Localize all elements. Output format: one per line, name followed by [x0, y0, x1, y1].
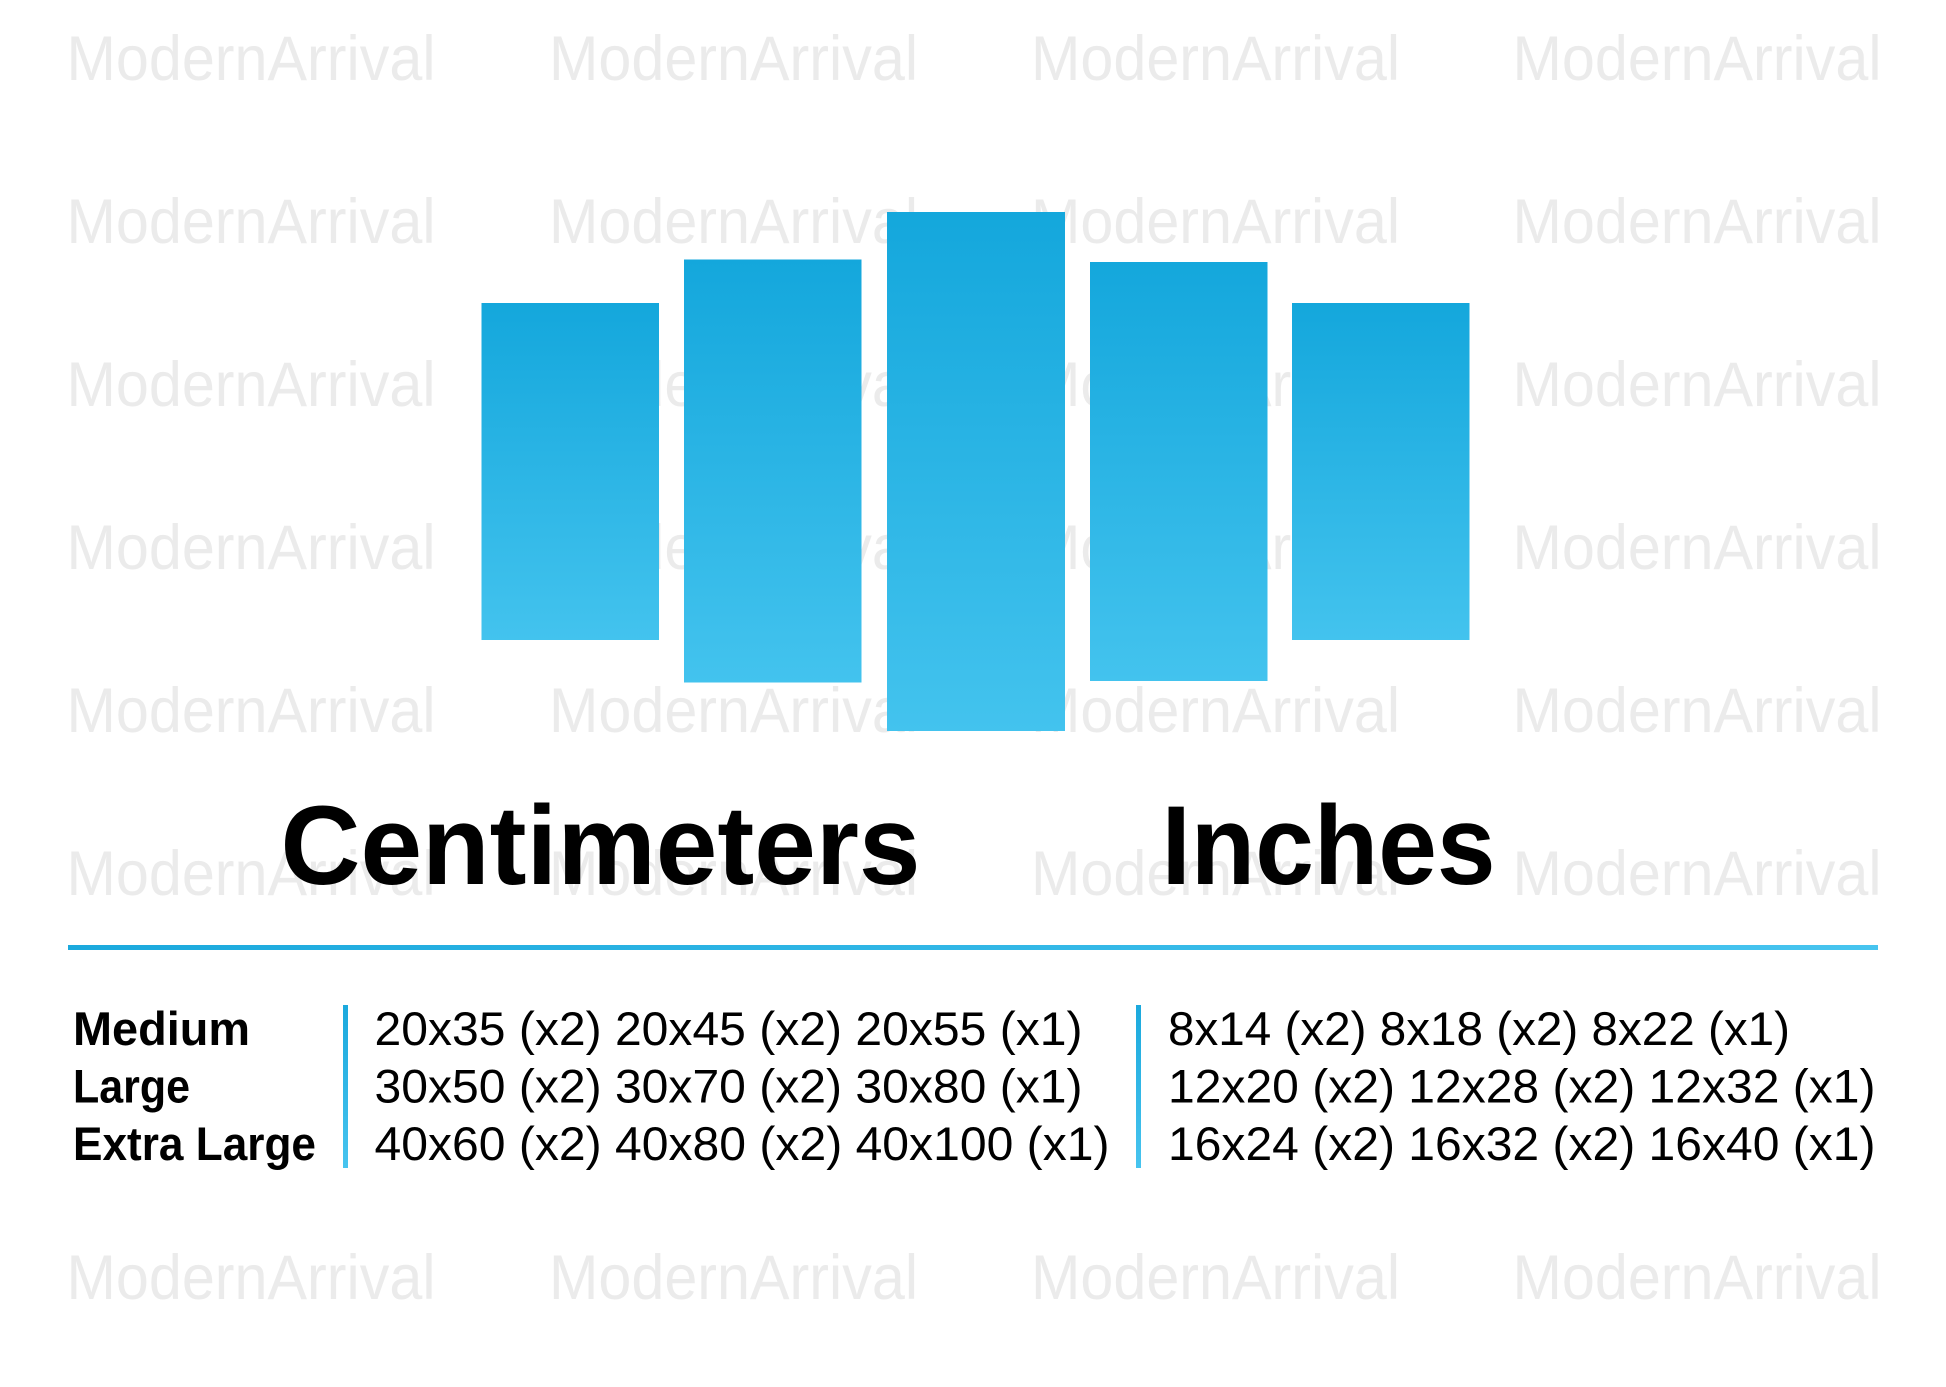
panel 3 — [887, 212, 1065, 731]
cm row: large: 30x50 (x2) 30x70 (x2) 30x80 (x1) — [374, 1060, 1082, 1112]
heading: centimeters: Centimeters — [280, 783, 920, 908]
watermark grid: ModernArrival — [1031, 350, 1400, 420]
watermark grid: ModernArrival — [66, 513, 436, 583]
size labels — [73, 1002, 316, 1170]
watermark grid: ModernArrival — [549, 350, 918, 420]
watermark grid: ModernArrival — [1512, 24, 1882, 94]
watermark grid: ModernArrival — [549, 187, 918, 257]
inch row: medium: 8x14 (x2) 8x18 (x2) 8x22 (x1) — [1168, 1002, 1790, 1055]
watermark grid: ModernArrival — [66, 1243, 436, 1313]
watermark grid: ModernArrival — [1031, 1243, 1400, 1313]
watermark grid: ModernArrival — [1512, 350, 1882, 420]
watermark grid: ModernArrival — [1031, 513, 1400, 583]
watermark grid: ModernArrival — [1512, 676, 1882, 746]
watermark grid: ModernArrival — [549, 1243, 918, 1313]
centimeter sizes — [374, 1002, 1110, 1170]
watermark grid: ModernArrival — [66, 676, 436, 746]
watermark grid: ModernArrival — [1031, 187, 1400, 257]
watermark grid: ModernArrival — [66, 839, 436, 909]
cm row: medium: 20x35 (x2) 20x45 (x2) 20x55 (x1) — [374, 1002, 1082, 1055]
panel 5 — [1292, 303, 1470, 640]
panel 2 — [684, 260, 862, 682]
label: large: Large — [73, 1060, 190, 1112]
five-panel canvas diagram — [482, 212, 1470, 731]
label: medium: Medium — [73, 1002, 250, 1055]
watermark grid: ModernArrival — [549, 676, 918, 746]
watermark grid: ModernArrival — [1512, 513, 1882, 583]
inch sizes — [1168, 1002, 1876, 1170]
label: extra large: Extra Large — [73, 1117, 316, 1170]
cm row: extra large: 40x60 (x2) 40x80 (x2) 40x100 (x1) — [374, 1117, 1110, 1170]
divider 2 — [1136, 1005, 1141, 1168]
watermark grid: ModernArrival — [66, 350, 436, 420]
inch row: extra large: 16x24 (x2) 16x32 (x2) 16x40 (x1) — [1168, 1117, 1876, 1170]
watermark grid: ModernArrival — [66, 187, 436, 257]
watermark grid: ModernArrival — [549, 24, 918, 94]
watermark grid: ModernArrival — [1512, 839, 1882, 909]
watermark grid: ModernArrival — [66, 24, 436, 94]
watermark grid: ModernArrival — [1031, 839, 1400, 909]
watermark grid: ModernArrival — [549, 839, 918, 909]
divider 1 — [343, 1005, 348, 1168]
watermark grid: ModernArrival — [1031, 676, 1400, 746]
horizontal rule — [68, 945, 1878, 950]
watermark grid: ModernArrival — [549, 513, 918, 583]
heading: inches: Inches — [1162, 783, 1496, 908]
watermark grid: ModernArrival — [1512, 1243, 1882, 1313]
watermark grid: ModernArrival — [1031, 24, 1400, 94]
watermark grid: ModernArrival — [1512, 187, 1882, 257]
panel 4 — [1090, 262, 1268, 681]
inch row: large: 12x20 (x2) 12x28 (x2) 12x32 (x1) — [1168, 1060, 1876, 1112]
panel 1 — [482, 303, 659, 640]
